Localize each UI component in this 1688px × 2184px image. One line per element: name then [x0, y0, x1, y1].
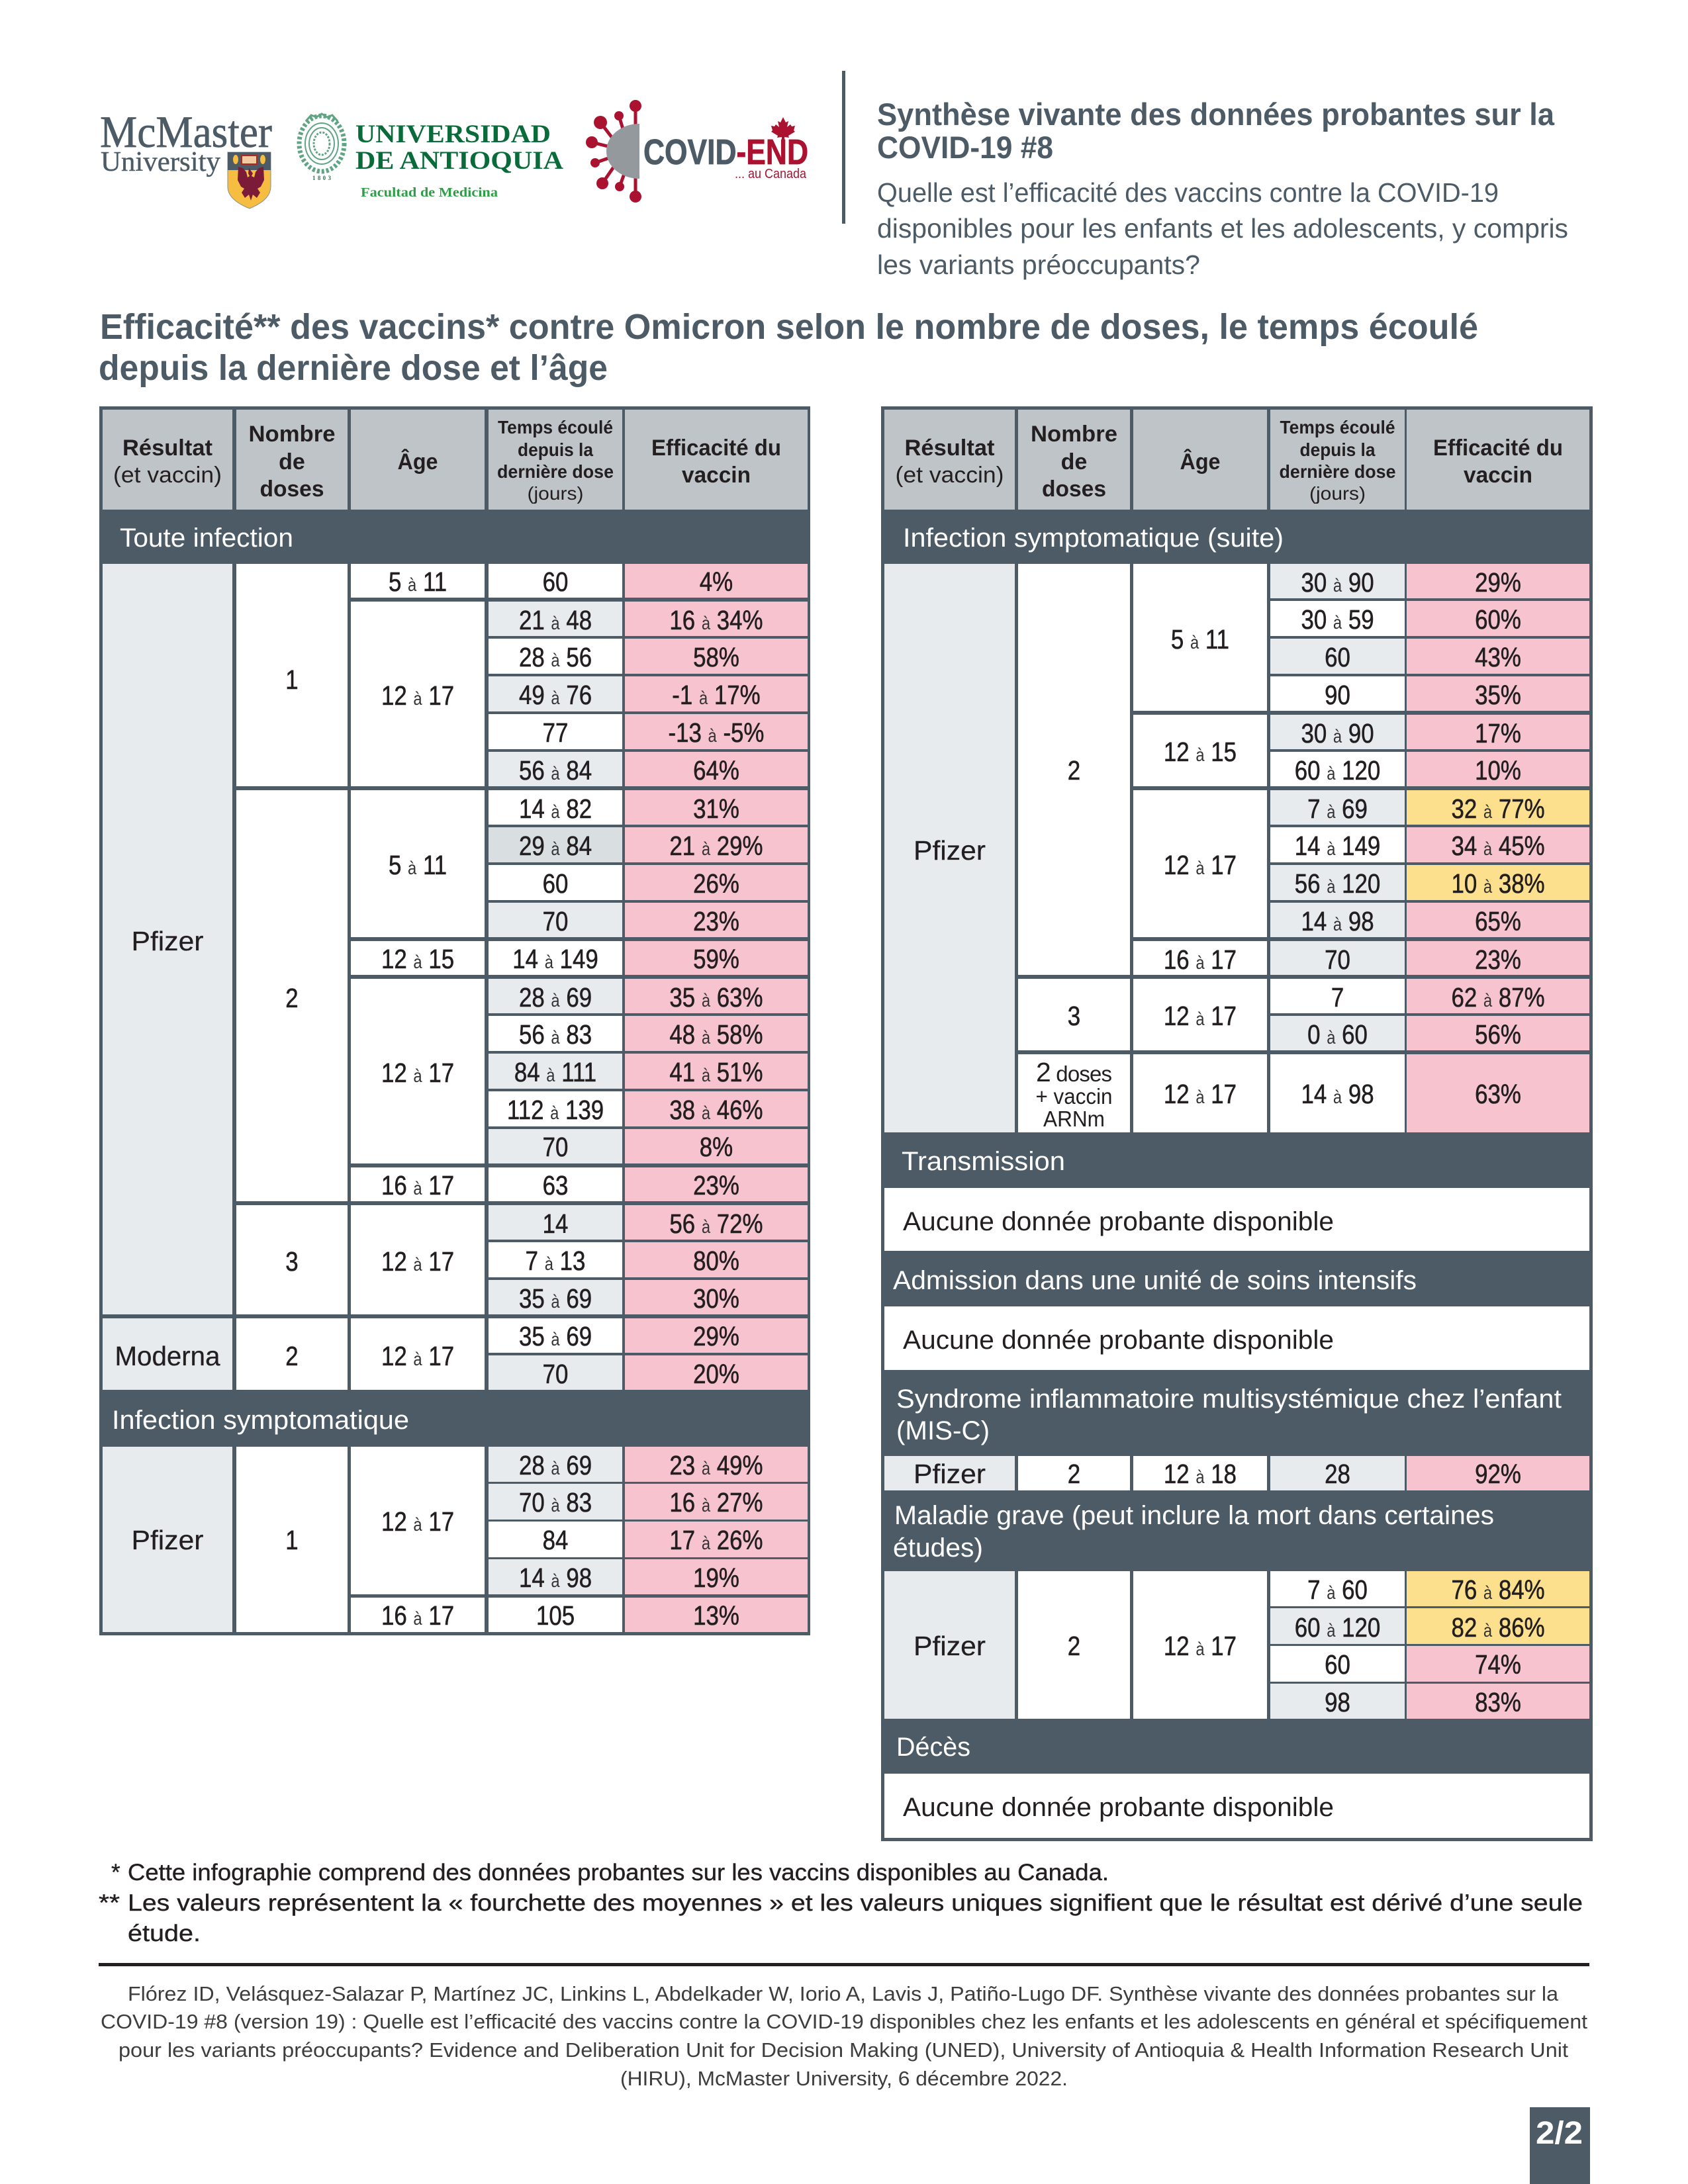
cell: age 12 à 15: 12 à 15	[1164, 737, 1237, 768]
cell: age 12 à 17	[1133, 979, 1267, 1050]
logo: COVID-END au Canada: ... au Canada	[735, 167, 807, 181]
text block: no evidence, ICU: Aucune donnée probante disponible	[903, 1326, 1334, 1355]
cell: age 5 à 11: 5 à 11	[389, 850, 447, 881]
row: 105, 13%: 13%	[693, 1601, 739, 1631]
row: 70, 8%	[489, 1129, 808, 1163]
table header: de	[1061, 449, 1087, 475]
row: 14 à 98, 63%	[1270, 1054, 1589, 1132]
row: 35 à 69, 29%: 29%	[693, 1322, 739, 1352]
row: 35 à 69, 30%	[489, 1280, 808, 1314]
cell: age 12 à 15	[1133, 715, 1267, 786]
row: 49 à 76, -1 à 17%	[489, 676, 808, 711]
row: 98, 83%	[1270, 1684, 1589, 1719]
row: 28 à 69, 35 à 63%: 35 à 63%	[669, 983, 763, 1013]
row: 60 à 120, 10%: 10%	[1475, 756, 1521, 786]
row: 60, 74%	[1270, 1646, 1589, 1682]
section heading: Transmission: Transmission	[902, 1147, 1065, 1176]
section heading: Décès: Décès	[896, 1733, 970, 1762]
row: 21 à 48, 16 à 34%: 21 à 48	[519, 606, 592, 636]
logo: Universidad de Antioquia: DE ANTIOQUIA	[355, 146, 563, 175]
cell: Pfizer	[884, 1571, 1015, 1719]
cell: Pfizer	[103, 1447, 232, 1632]
cell: Pfizer	[103, 564, 232, 1314]
row: 7, 62 à 87%: 62 à 87%	[1452, 983, 1545, 1013]
row: 70, 20%: 20%	[693, 1359, 739, 1390]
row: 77, -13 à -5%	[489, 714, 808, 749]
row: 105, 13%	[489, 1598, 808, 1632]
row: 35 à 69, 29%	[489, 1318, 808, 1353]
cell: 2 doses	[1018, 564, 1130, 975]
heading: living evidence synthesis: COVID-19 #8	[877, 130, 1053, 165]
row: 14 à 82, 31%: 31%	[693, 794, 739, 825]
table header: (et vaccin)	[895, 463, 1004, 488]
title	[99, 307, 1478, 388]
row: 60 à 120, 10%	[1270, 752, 1589, 786]
row: 49 à 76, -1 à 17%: -1 à 17%	[672, 680, 761, 711]
row: 60 à 120, 10%: 60 à 120	[1295, 756, 1380, 786]
row: 30 à 59, 60%: 60%	[1475, 605, 1521, 635]
row: 7 à 60, 76 à 84%	[1270, 1571, 1589, 1606]
cell: 2 doses + vaccin ARNm: 2 doses	[1036, 1057, 1112, 1087]
row: 70, 23%	[489, 903, 808, 937]
row: 14, 56 à 72%: 56 à 72%	[669, 1209, 763, 1240]
row: 7, 62 à 87%: 7	[1331, 983, 1344, 1013]
row: 70, 20%	[489, 1355, 808, 1390]
logo: McMaster University: University	[101, 147, 220, 177]
row: 29 à 84, 21 à 29%: 29 à 84	[519, 831, 592, 862]
table header: depuis la	[1300, 439, 1376, 460]
cell: age 12 à 17: 12 à 17	[381, 1058, 454, 1089]
cell: age 12 à 15: 12 à 15	[381, 944, 454, 975]
row: 14 à 98, 19%	[489, 1559, 808, 1594]
row: 30 à 59, 60%	[1270, 601, 1589, 636]
cell: 3 doses	[1018, 979, 1130, 1050]
table header: (jours)	[1309, 483, 1366, 504]
row: 70, 23%: 23%	[693, 907, 739, 937]
row: 21 à 48, 16 à 34%: 16 à 34%	[669, 606, 763, 636]
cell: 3 doses: 3	[1068, 1001, 1080, 1032]
text block: citation: Flórez ID, Velásquez-Salazar P, Martínez JC, Linkins L, Abdelkader W, Iorio A, Lavis J, Patiño-Lugo DF. Synthèse vivante des données probantes sur la	[128, 1982, 1559, 2005]
row: 7 à 13, 80%: 80%	[693, 1246, 739, 1277]
text block: research question	[877, 177, 1568, 280]
table header: Temps écoulé	[1280, 417, 1395, 437]
text block: no evidence, deaths	[884, 1774, 1589, 1838]
row: 60 days, 4%: 4%	[700, 567, 733, 598]
panel: right table	[881, 406, 1593, 1841]
row: MIS-C Pfizer data: 12 à 18	[1164, 1459, 1237, 1490]
row: 14 à 98, 65%: 14 à 98	[1301, 907, 1374, 937]
row: 28 à 56, 58%: 28 à 56	[519, 643, 592, 673]
page number tab: 2/2	[1536, 2116, 1583, 2151]
section heading: ICU admission: Admission dans une unité de soins intensifs	[893, 1266, 1417, 1295]
row: 56 à 120, 10 à 38%: 56 à 120	[1295, 869, 1380, 899]
row: 14 à 98, 19%: 14 à 98	[519, 1563, 592, 1594]
row: MIS-C Pfizer data: 92%	[1475, 1459, 1521, 1490]
row: 14, 56 à 72%: 14	[543, 1209, 568, 1240]
cell: age 12 à 17: 12 à 17	[1164, 1631, 1237, 1662]
cell: 3 doses: 3	[285, 1247, 299, 1277]
row: 7 à 69, 32 à 77%: 7 à 69	[1307, 794, 1368, 825]
row: 60, 26%	[489, 865, 808, 900]
row: 0 à 60, 56%	[1270, 1016, 1589, 1050]
row: 14 à 149, 59%	[489, 941, 808, 975]
row: MIS-C Pfizer data: 28	[1325, 1459, 1350, 1490]
row: 70 à 83, 16 à 27%: 70 à 83	[519, 1488, 592, 1518]
row: 98, 83%: 83%	[1475, 1688, 1521, 1718]
cell: Pfizer	[884, 564, 1015, 1132]
row: 21 à 48, 16 à 34%	[489, 602, 808, 636]
text block: no evidence, deaths: Aucune donnée probante disponible	[903, 1793, 1334, 1822]
table header: Efficacité du	[1433, 435, 1563, 461]
logo: McMaster University	[100, 107, 272, 208]
row: 30 à 90, 29%: 30 à 90	[1301, 568, 1374, 598]
cell: age 16 à 17: 16 à 17	[381, 1601, 454, 1631]
table header: Âge	[1180, 449, 1221, 475]
table header: dernière dose	[497, 461, 614, 482]
icon: virus	[586, 100, 641, 203]
cell: Pfizer: Pfizer	[131, 926, 204, 956]
row: 30 à 90, 17%: 17%	[1475, 719, 1521, 749]
row: 14 à 98, 63%: 14 à 98	[1301, 1079, 1374, 1110]
cell: age 12 à 17: 12 à 17	[1164, 1001, 1237, 1032]
row: 90, 35%: 35%	[1475, 680, 1521, 711]
section heading: severe illness	[893, 1501, 1494, 1563]
row: 105, 13%: 105	[536, 1601, 575, 1631]
row: 28 à 69, 35 à 63%: 28 à 69	[519, 983, 592, 1013]
cell: Pfizer: Pfizer	[914, 835, 986, 866]
cell: age 16 à 17: 16 à 17	[381, 1171, 454, 1201]
row: 0 à 60, 56%: 56%	[1475, 1020, 1521, 1050]
text block: no evidence, transmission	[884, 1188, 1589, 1251]
row: 63, 23%	[489, 1167, 808, 1201]
table header: (jours)	[527, 483, 584, 504]
row: 84, 17 à 26%: 17 à 26%	[669, 1525, 763, 1556]
cell: age 16 à 17	[351, 1598, 485, 1632]
row: 56 à 84, 64%	[489, 752, 808, 786]
row: 30 à 59, 60%: 30 à 59	[1301, 605, 1374, 635]
row: 70, 23%: 70	[543, 907, 568, 937]
cell: Pfizer: Pfizer	[131, 1525, 204, 1555]
row: 56 à 83, 48 à 58%: 56 à 83	[519, 1020, 592, 1050]
row: 56 à 83, 48 à 58%	[489, 1016, 808, 1051]
logo: Universidad de Antioquia: UNIVERSIDAD	[355, 120, 551, 148]
text block: citation	[101, 1982, 1587, 2090]
row: 14 à 149, 34 à 45%: 34 à 45%	[1452, 831, 1545, 862]
row: 60 days, 4%	[489, 564, 808, 598]
cell: Moderna 2 doses: 2	[285, 1342, 299, 1372]
table header: Nombre	[249, 422, 335, 447]
row: 30 à 90, 29%: 29%	[1475, 568, 1521, 598]
cell: Moderna age 12 à 17: 12 à 17	[381, 1342, 454, 1372]
cell: age 5 à 11	[351, 564, 485, 598]
cell: age 16 à 17	[1133, 941, 1267, 976]
row: 70, 23%	[1270, 941, 1589, 976]
cell: 2 doses + vaccin ARNm	[1018, 1054, 1130, 1132]
row: 60, 26%: 26%	[693, 869, 739, 899]
row: 60 à 120, 82 à 86%	[1270, 1608, 1589, 1644]
table header: dernière dose	[1279, 461, 1395, 482]
logo: Universidad de Antioquia	[299, 114, 563, 200]
cell: age 12 à 17: 12 à 17	[1164, 850, 1237, 881]
row: 56 à 120, 10 à 38%: 10 à 38%	[1452, 869, 1545, 899]
text block: citation: COVID-19 #8 (version 19) : Quelle est l’efficacité des vaccins contre la COVID-19 disponibles chez les enfants et les adolescents en général et spécifiquement	[101, 2010, 1587, 2033]
text block: research question: disponibles pour les enfants et les adolescents, y compris	[877, 213, 1568, 244]
cell: 2 doses: 2	[1068, 756, 1080, 786]
row: 84 à 111, 41 à 51%: 41 à 51%	[669, 1058, 763, 1088]
row: 77, -13 à -5%: 77	[543, 718, 568, 749]
logo: COVID-END au Canada: COVID-END	[643, 132, 808, 172]
text block: citation: pour les variants préoccupants? Evidence and Deliberation Unit for Decision Making (UNED), University of Antioquia & Health Information Research Unit	[118, 2038, 1568, 2062]
cell: age 12 à 17	[351, 1447, 485, 1594]
text block: research question: les variants préoccupants?	[877, 250, 1200, 280]
icon: McMaster shield	[228, 152, 271, 208]
row: 63, 23%: 63	[543, 1171, 568, 1201]
cell: age 12 à 17	[351, 979, 485, 1163]
text block: footnotes	[99, 1860, 1583, 1946]
row: 7 à 69, 32 à 77%: 32 à 77%	[1452, 794, 1545, 825]
row: 30 à 90, 17%	[1270, 715, 1589, 749]
header divider line	[842, 71, 845, 224]
row: 14 à 149, 59%: 14 à 149	[512, 944, 598, 975]
section heading: MIS-C: (MIS-C)	[896, 1416, 990, 1445]
cell: age 16 à 17: 16 à 17	[1164, 945, 1237, 976]
row: 28 à 69, 23 à 49%: 28 à 69	[519, 1451, 592, 1481]
table header: (et vaccin)	[113, 463, 222, 488]
logo: Universidad de Antioquia: 1803	[312, 175, 331, 181]
text block: footnotes: Cette infographie comprend des données probantes sur les vaccins disponibles au Canada.	[128, 1860, 1109, 1886]
logo: Universidad de Antioquia: Facultad de Medicina	[361, 185, 498, 200]
cell: age 12 à 17	[351, 602, 485, 786]
row: 56 à 83, 48 à 58%: 48 à 58%	[669, 1020, 763, 1050]
cell: age 16 à 17	[351, 1167, 485, 1201]
row: 29 à 84, 21 à 29%: 21 à 29%	[669, 831, 763, 862]
row: 84 à 111, 41 à 51%: 84 à 111	[514, 1058, 596, 1088]
row: 35 à 69, 30%: 35 à 69	[519, 1284, 592, 1314]
row: 28 à 69, 23 à 49%: 23 à 49%	[669, 1451, 763, 1481]
row: 30 à 90, 29%	[1270, 564, 1589, 598]
text block: footnotes: *	[111, 1860, 120, 1886]
row: 63, 23%: 23%	[693, 1171, 739, 1201]
row: 60 days, 4%: 60	[543, 567, 568, 598]
cell: 2 doses: 2	[285, 983, 299, 1014]
logo: COVID-END au Canada	[586, 100, 808, 203]
cell: age 12 à 17	[351, 1205, 485, 1314]
page number tab	[1530, 2107, 1590, 2184]
text block: citation: (HIRU), McMaster University, 6 décembre 2022.	[620, 2067, 1068, 2090]
row: MIS-C Pfizer data: Pfizer	[914, 1459, 986, 1489]
row: 14, 56 à 72%	[489, 1205, 808, 1240]
cell: Moderna: Moderna	[115, 1341, 220, 1371]
cell: 1 dose: 1	[285, 665, 299, 696]
row: 14 à 149, 34 à 45%: 14 à 149	[1295, 831, 1380, 862]
footer rule	[99, 1963, 1589, 1966]
row: 60, 74%: 60	[1325, 1650, 1350, 1680]
row: 70, 20%: 70	[543, 1359, 568, 1390]
section heading: Infection symptomatique: Infection symptomatique	[112, 1406, 409, 1435]
section heading: Infection symptomatique (suite): Infection symptomatique (suite)	[903, 523, 1284, 553]
row: 7 à 13, 80%: 7 à 13	[526, 1246, 585, 1277]
cell: 1 dose: 1	[285, 1525, 299, 1556]
row: 49 à 76, -1 à 17%: 49 à 76	[519, 680, 592, 711]
cell: Pfizer: Pfizer	[914, 1631, 986, 1661]
row: 60 à 120, 82 à 86%: 82 à 86%	[1452, 1613, 1545, 1643]
section heading: MIS-C	[896, 1385, 1562, 1445]
cell: age 5 à 11	[351, 790, 485, 937]
section heading: MIS-C: Syndrome inflammatoire multisystémique chez l’enfant	[896, 1385, 1562, 1414]
row: 56 à 84, 64%: 64%	[693, 756, 739, 786]
table header: vaccin	[682, 463, 751, 488]
cell: age 12 à 17: 12 à 17	[1164, 1079, 1237, 1110]
table header: depuis la	[518, 439, 593, 460]
row: 56 à 84, 64%: 56 à 84	[519, 756, 592, 786]
section heading: severe illness: Maladie grave (peut inclure la mort dans certaines	[894, 1501, 1494, 1530]
text block: footnotes: **	[99, 1890, 120, 1916]
row: 14 à 98, 65%: 65%	[1475, 907, 1521, 937]
text block: footnotes: étude.	[128, 1921, 201, 1946]
row: 112 à 139, 38 à 46%: 38 à 46%	[669, 1095, 763, 1126]
cell: 1 dose	[236, 564, 348, 786]
cell: 1 dose	[236, 1447, 348, 1632]
row: 60, 43%	[1270, 639, 1589, 674]
heading: living evidence synthesis	[877, 97, 1555, 165]
row: 90, 35%	[1270, 676, 1589, 711]
row: 60, 26%: 60	[543, 869, 568, 899]
row: 14 à 149, 59%: 59%	[693, 944, 739, 975]
cell: 2 doses + vaccin ARNm: + vaccin	[1035, 1084, 1112, 1109]
table header: Résultat	[904, 435, 994, 461]
table header: Nombre	[1031, 422, 1117, 447]
cell: 2 doses: 2	[1068, 1631, 1080, 1662]
cell: age 5 à 11	[1133, 564, 1267, 711]
row: 28 à 56, 58%: 58%	[693, 643, 739, 673]
row: 28 à 56, 58%	[489, 639, 808, 674]
table header: Efficacité du	[651, 435, 781, 461]
cell: age 5 à 11: 5 à 11	[1171, 625, 1229, 655]
row: 29 à 84, 21 à 29%	[489, 827, 808, 862]
row: 30 à 90, 17%: 30 à 90	[1301, 719, 1374, 749]
cell: age 12 à 17	[1133, 1054, 1267, 1132]
row: 7 à 69, 32 à 77%	[1270, 790, 1589, 825]
heading: living evidence synthesis: Synthèse vivante des données probantes sur la	[877, 97, 1555, 132]
row: 112 à 139, 38 à 46%: 112 à 139	[507, 1095, 604, 1126]
row: 84, 17 à 26%	[489, 1522, 808, 1557]
table header: Temps écoulé	[498, 417, 613, 437]
table header: doses	[259, 477, 324, 502]
title: depuis la dernière dose et l’âge	[99, 348, 608, 388]
row: 28 à 69, 23 à 49%	[489, 1447, 808, 1482]
section heading: Toute infection: Toute infection	[120, 523, 293, 553]
row: 60, 74%: 74%	[1475, 1650, 1521, 1680]
cell: Moderna	[103, 1318, 232, 1390]
cell: 2 doses + vaccin ARNm: ARNm	[1043, 1107, 1105, 1131]
row: 35 à 69, 29%: 35 à 69	[519, 1322, 592, 1352]
row: 7, 62 à 87%	[1270, 979, 1589, 1013]
row: 84 à 111, 41 à 51%	[489, 1054, 808, 1089]
row: 7 à 13, 80%	[489, 1242, 808, 1277]
row: 60 à 120, 82 à 86%: 60 à 120	[1295, 1613, 1380, 1643]
row: 70 à 83, 16 à 27%: 16 à 27%	[669, 1488, 763, 1518]
cell: age 12 à 17: 12 à 17	[381, 681, 454, 711]
cell: age 12 à 17	[1133, 1571, 1267, 1719]
table header	[884, 410, 1589, 510]
row: 14 à 82, 31%: 14 à 82	[519, 794, 592, 825]
row: MIS-C Pfizer data	[884, 1456, 1589, 1490]
cell: Moderna 2 doses	[236, 1318, 348, 1390]
row: 7 à 60, 76 à 84%: 76 à 84%	[1452, 1575, 1545, 1606]
icon: maple leaf	[771, 117, 795, 140]
row: MIS-C Pfizer data: 2	[1068, 1459, 1080, 1490]
row: 60, 43%: 60	[1325, 643, 1350, 673]
logo: McMaster University: McMaster	[100, 107, 272, 157]
table header	[103, 410, 808, 510]
cell: 2 doses	[236, 790, 348, 1201]
row: 70, 23%: 23%	[1475, 945, 1521, 976]
row: 70, 8%: 70	[543, 1132, 568, 1163]
table header: doses	[1042, 477, 1106, 502]
row: 60, 43%: 43%	[1475, 643, 1521, 673]
cell: age 5 à 11: 5 à 11	[389, 567, 447, 598]
table header: de	[279, 449, 305, 475]
cell: age 12 à 17: 12 à 17	[381, 1507, 454, 1537]
row: 56 à 120, 10 à 38%	[1270, 865, 1589, 900]
row: 84, 17 à 26%: 84	[543, 1525, 568, 1556]
row: 14 à 82, 31%	[489, 790, 808, 825]
row: 77, -13 à -5%: -13 à -5%	[669, 718, 764, 749]
cell: Moderna age 12 à 17	[351, 1318, 485, 1390]
cell: age 12 à 15	[351, 941, 485, 975]
row: 98, 83%: 98	[1325, 1688, 1350, 1718]
row: 14 à 98, 63%: 63%	[1475, 1079, 1521, 1110]
icon: university seal	[299, 114, 344, 171]
cell: 2 doses	[1018, 1571, 1130, 1719]
cell: 3 doses	[236, 1205, 348, 1314]
text block: research question: Quelle est l’efficacité des vaccins contre la COVID-19	[877, 177, 1499, 208]
row: 35 à 69, 30%: 30%	[693, 1284, 739, 1314]
text block: footnotes: Les valeurs représentent la « fourchette des moyennes » et les valeurs uniques signifient que le résultat est dérivé d’une seule	[128, 1890, 1583, 1916]
row: 14 à 149, 34 à 45%	[1270, 827, 1589, 862]
text block: no evidence, transmission: Aucune donnée probante disponible	[903, 1207, 1334, 1236]
row: 70, 23%: 70	[1325, 945, 1350, 976]
row: 70, 8%: 8%	[700, 1132, 733, 1163]
title: Efficacité** des vaccins* contre Omicron selon le nombre de doses, le temps écoulé	[100, 307, 1478, 347]
row: 7 à 60, 76 à 84%: 7 à 60	[1307, 1575, 1368, 1606]
section heading: severe illness: études)	[893, 1533, 983, 1563]
table header: Âge	[397, 449, 438, 475]
row: 0 à 60, 56%: 0 à 60	[1307, 1020, 1368, 1050]
row: 90, 35%: 90	[1325, 680, 1350, 711]
text block: no evidence, ICU	[884, 1306, 1589, 1370]
table header: Résultat	[122, 435, 212, 461]
row: 28 à 69, 35 à 63%	[489, 979, 808, 1013]
cell: age 12 à 17	[1133, 790, 1267, 937]
row: 14 à 98, 65%	[1270, 903, 1589, 937]
panel: left table	[99, 406, 810, 1635]
cell: age 12 à 17: 12 à 17	[381, 1247, 454, 1277]
row: 70 à 83, 16 à 27%	[489, 1484, 808, 1520]
table header: vaccin	[1464, 463, 1532, 488]
row: 112 à 139, 38 à 46%	[489, 1091, 808, 1126]
row: 14 à 98, 19%: 19%	[693, 1563, 739, 1594]
